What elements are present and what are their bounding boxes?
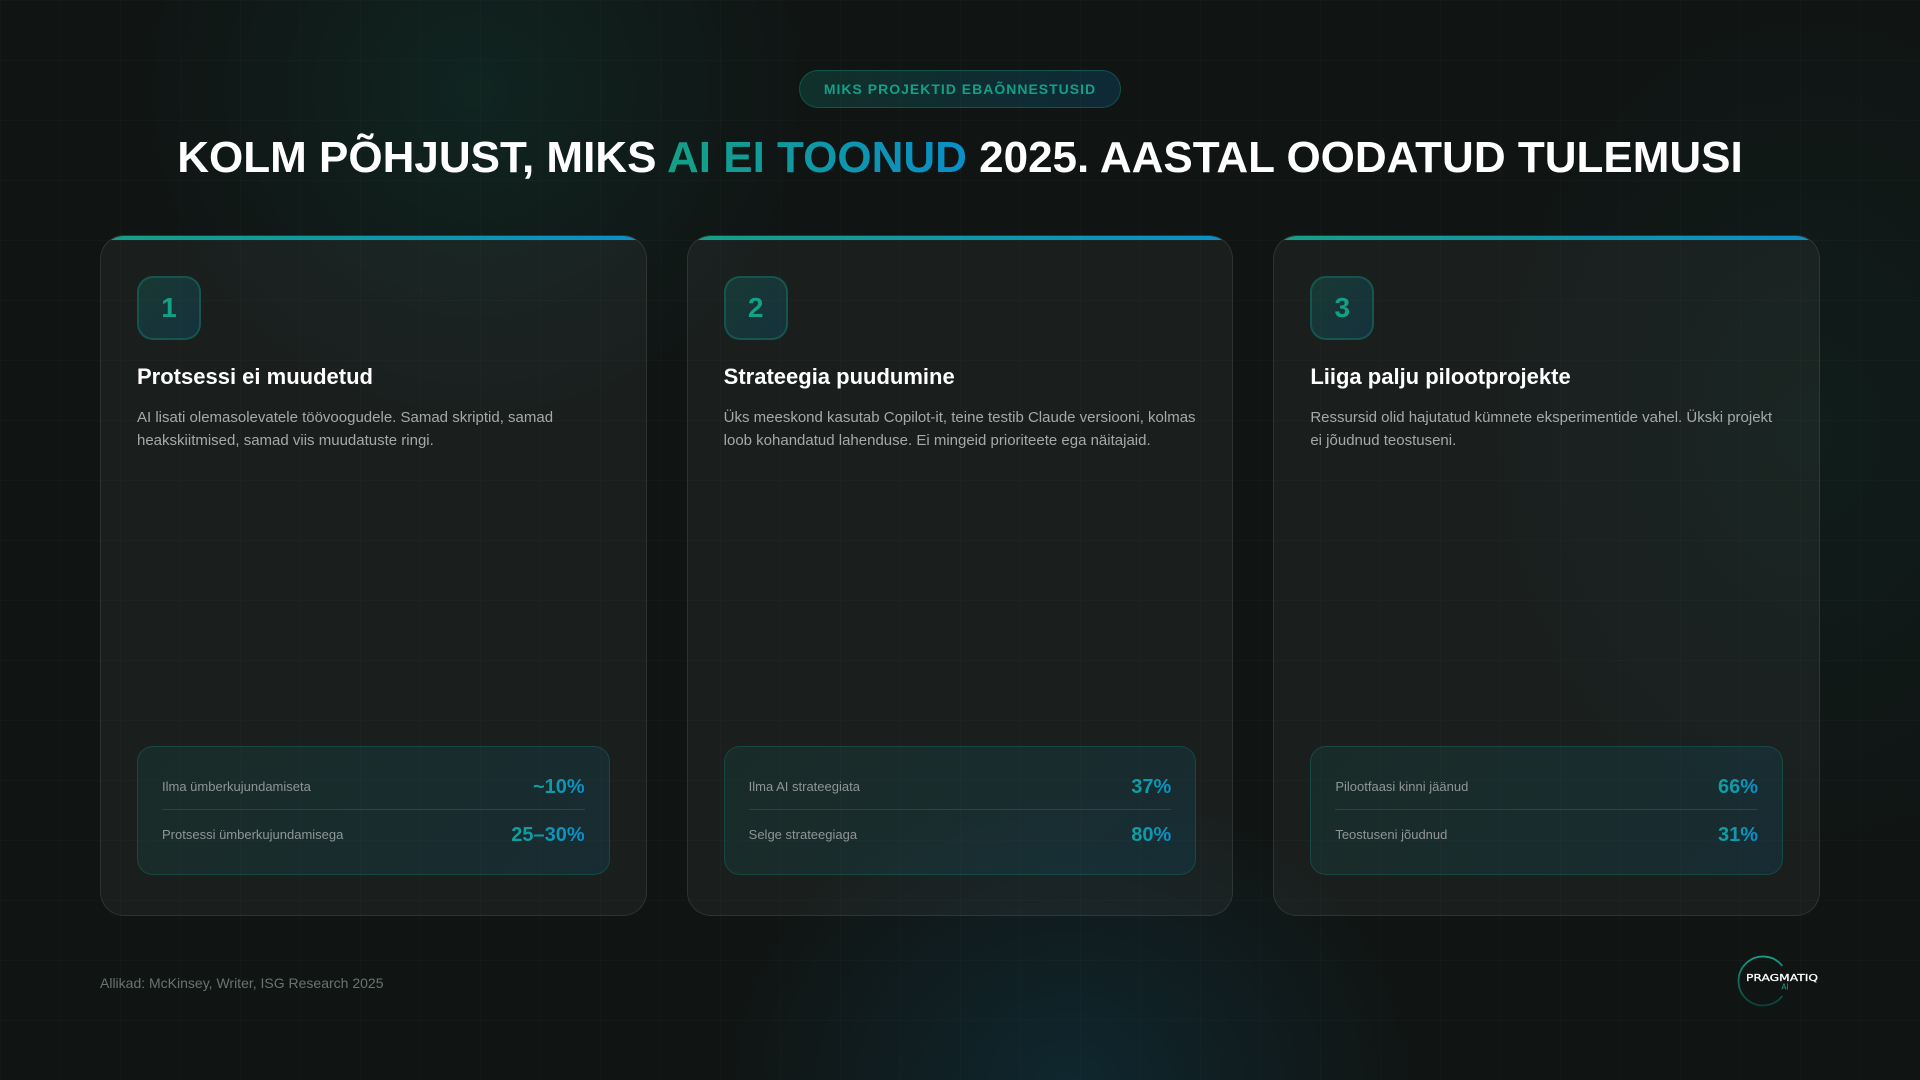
number badge 3 xyxy=(1310,276,1374,340)
heading 2: Strateegia puudumine xyxy=(724,364,955,389)
number badge 3: 3 xyxy=(1335,292,1350,323)
stats box 2: 80% xyxy=(1131,824,1171,846)
heading 3: Liiga palju pilootprojekte xyxy=(1310,364,1571,389)
panel: reason 1 xyxy=(100,235,647,916)
description 3: Ressursid olid hajutatud kümnete eksperimentide vahel. Ükski projekt ei jõudnud teostuseni. xyxy=(1310,409,1772,449)
stats box 1: ~10% xyxy=(533,776,585,798)
stats box 2: Selge strateegiaga xyxy=(749,826,857,842)
number badge 2: 2 xyxy=(748,292,763,323)
stats box 2: Ilma AI strateegiata xyxy=(749,778,860,794)
logo: Pragmatiq AI: PRAGMATIQ xyxy=(1746,973,1818,984)
description 1: AI lisati olemasolevatele töövoogudele. Samad skriptid, samad heakskiitmised, samad viis muudatuste ringi. xyxy=(137,409,553,449)
stats box 3: 31% xyxy=(1718,824,1758,846)
number badge 1: 1 xyxy=(161,292,177,323)
title: KOLM PÕHJUST, MIKS AI EI TOONUD 2025. AASTAL OODATUD TULEMUSI xyxy=(177,133,1743,182)
stats box 1: 25–30% xyxy=(511,824,585,846)
stats box 1: Protsessi ümberkujundamisega xyxy=(162,826,343,842)
heading 1: Protsessi ei muudetud xyxy=(137,364,373,389)
number badge 2 xyxy=(724,276,788,340)
logo: Pragmatiq AI xyxy=(1738,956,1818,1006)
panel: reason 2 xyxy=(687,235,1233,916)
number badge 1 xyxy=(137,276,201,340)
stats box 2: 37% xyxy=(1131,776,1171,798)
stats box 1: Ilma ümberkujundamiseta xyxy=(162,778,311,794)
stats box 2 xyxy=(724,746,1196,875)
eyebrow pill: MIKS PROJEKTID EBAÕNNESTUSID xyxy=(824,81,1096,97)
description 2: Üks meeskond kasutab Copilot-it, teine testib Claude versiooni, kolmas loob kohandatud lahenduse. Ei mingeid prioriteete ega näitajaid. xyxy=(724,409,1196,449)
stats box 3 xyxy=(1310,746,1783,875)
panel: reason 3 xyxy=(1273,235,1820,916)
source note: Allikad: McKinsey, Writer, ISG Research 2025 xyxy=(100,975,383,991)
stats box 1 xyxy=(137,746,610,875)
stats box 3: Teostuseni jõudnud xyxy=(1335,826,1447,842)
logo: Pragmatiq AI: AI xyxy=(1781,982,1789,992)
stats box 3: 66% xyxy=(1718,776,1758,798)
eyebrow pill xyxy=(799,70,1121,108)
stats box 3: Pilootfaasi kinni jäänud xyxy=(1335,778,1468,794)
